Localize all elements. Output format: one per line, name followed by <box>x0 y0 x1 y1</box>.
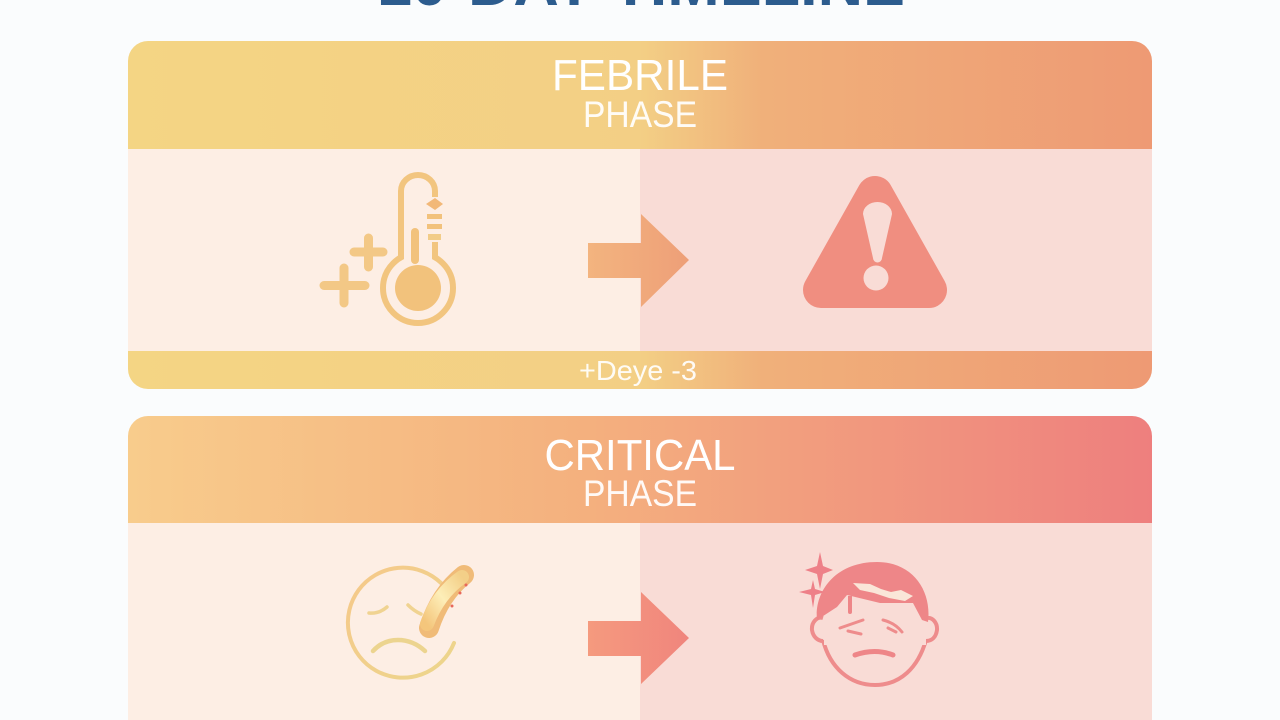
panel body right <box>640 149 1152 351</box>
febrile header band <box>128 41 1152 149</box>
febrile heading: FEBRILE <box>552 51 728 100</box>
critical header band <box>128 416 1152 523</box>
critical subheading: PHASE <box>583 473 697 514</box>
icon: head with headache <box>799 552 937 685</box>
critical body right <box>640 523 1152 720</box>
icon: sad face with swollen finger <box>348 568 468 678</box>
critical body left <box>128 523 640 720</box>
febrile subheading: PHASE <box>583 94 697 135</box>
arrow: febrile progression <box>588 214 689 307</box>
critical heading: CRITICAL <box>544 431 736 480</box>
panel: febrile phase <box>128 41 1152 389</box>
arrow: critical progression <box>588 592 689 684</box>
panel body left <box>128 149 640 351</box>
icon: warning triangle <box>821 194 929 290</box>
panel: critical phase <box>128 416 1152 720</box>
febrile footer band <box>128 351 1152 389</box>
icon: thermometer <box>324 175 453 323</box>
febrile day label: +Deye -3 <box>579 355 697 386</box>
